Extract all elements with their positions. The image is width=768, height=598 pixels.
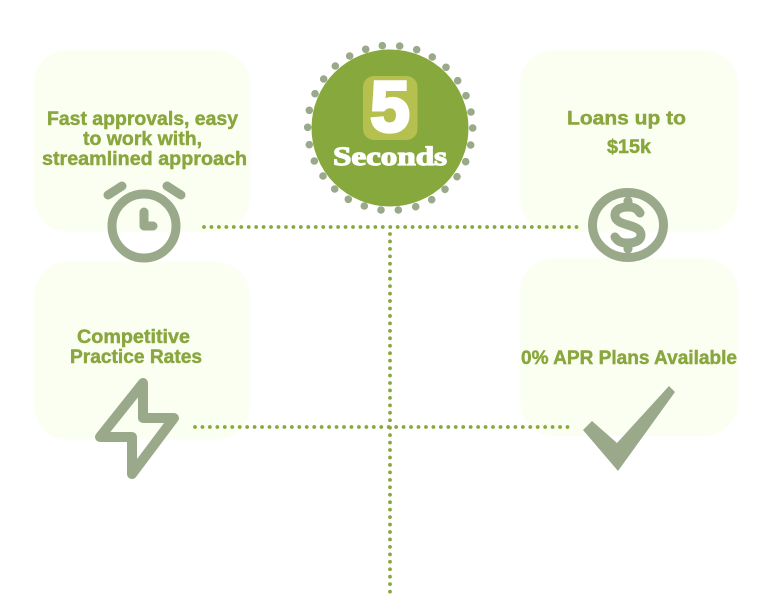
- badge: 5 seconds: [304, 42, 477, 214]
- badge number: 5: [370, 68, 410, 148]
- panel: bottom right: [520, 258, 738, 436]
- text: APR plans: 0% APR Plans Available: [521, 347, 737, 369]
- icon: lightning bolt: [100, 383, 174, 474]
- text: fast approvals: streamlined approach: [42, 149, 247, 170]
- panel: top right: [520, 50, 738, 232]
- badge label: Seconds: [333, 142, 447, 171]
- text: loans: Loans up to: [567, 108, 686, 130]
- icon: alarm clock: [108, 186, 181, 258]
- text: competitive rates: [70, 327, 202, 368]
- badge dot ring: [304, 42, 477, 214]
- panel: bottom left: [34, 262, 250, 440]
- badge circle: [312, 50, 468, 206]
- text: loans: $15k: [607, 136, 651, 158]
- text: loans: [567, 108, 686, 158]
- text: fast approvals: [42, 109, 247, 170]
- text: fast approvals: to work with,: [83, 129, 202, 150]
- text: competitive rates: Practice Rates: [70, 347, 202, 368]
- dotted connector lines: [195, 227, 578, 592]
- panel: top left: [34, 50, 250, 232]
- icon: dollar coin: [592, 192, 664, 258]
- icon: check mark: [583, 386, 675, 471]
- text: fast approvals: Fast approvals, easy: [47, 109, 238, 130]
- text: competitive rates: Competitive: [77, 327, 190, 348]
- badge number tile: [363, 76, 418, 140]
